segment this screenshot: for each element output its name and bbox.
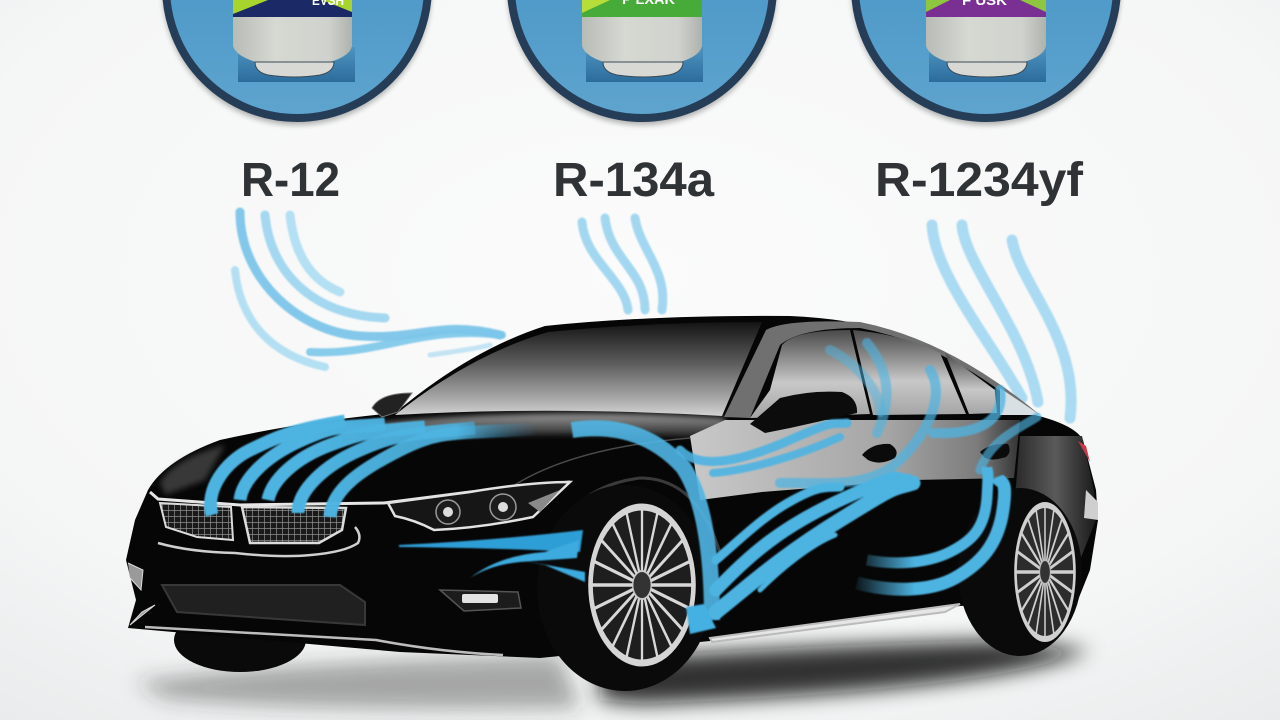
left wing mirror xyxy=(372,393,412,417)
airflow: R-134a stream into car xyxy=(582,218,663,310)
icon: R-134a refrigerant canister badge xyxy=(508,0,776,125)
rear side window xyxy=(853,330,966,415)
ground shadow xyxy=(135,640,1090,709)
front grille right xyxy=(242,507,346,543)
front side window xyxy=(750,330,870,418)
icon: R-1234yf refrigerant canister badge xyxy=(852,0,1120,125)
quarter window xyxy=(945,353,997,414)
door panel xyxy=(690,420,1020,500)
car xyxy=(126,316,1098,672)
rear bumper highlight xyxy=(1084,490,1098,520)
hood left highlight xyxy=(160,445,225,495)
front right wheel xyxy=(537,485,713,691)
airflow: front wheel arch streams xyxy=(399,428,716,634)
door mirror xyxy=(750,392,857,433)
airflow: door and side streams xyxy=(680,343,1037,612)
airflow: R-12 stream into car xyxy=(235,212,502,367)
bonnet crease xyxy=(510,438,690,488)
front left tyre xyxy=(174,608,306,672)
rear wheel arch highlight xyxy=(1000,498,1082,530)
car body xyxy=(126,316,1098,658)
hood highlight xyxy=(330,413,725,442)
roof pillar xyxy=(724,321,1040,418)
tail light xyxy=(1078,441,1090,462)
chrome strip xyxy=(150,482,570,505)
side sill xyxy=(710,604,960,642)
rear glass xyxy=(1000,388,1040,415)
front chrome lines xyxy=(145,627,503,655)
lower intake xyxy=(162,585,365,625)
fog light xyxy=(440,590,521,611)
windshield xyxy=(395,322,762,416)
front grille left xyxy=(160,503,233,540)
door handles xyxy=(862,444,1010,463)
icon: R-12 refrigerant canister badge xyxy=(163,0,431,125)
label: R-1234yf: R-1234yf xyxy=(875,154,1084,207)
label: R-134a: R-134a xyxy=(553,154,714,207)
bumper accent xyxy=(128,563,155,625)
front wheel arch highlight xyxy=(545,478,722,600)
headlight xyxy=(388,482,570,530)
rear quarter xyxy=(1015,436,1096,560)
chrome lower trim xyxy=(158,527,359,556)
airflow: R-1234yf stream into car xyxy=(932,225,1071,418)
label: R-12: R-12 xyxy=(241,154,340,207)
airflow: hood stripes xyxy=(211,421,535,517)
rear right wheel xyxy=(958,488,1082,656)
